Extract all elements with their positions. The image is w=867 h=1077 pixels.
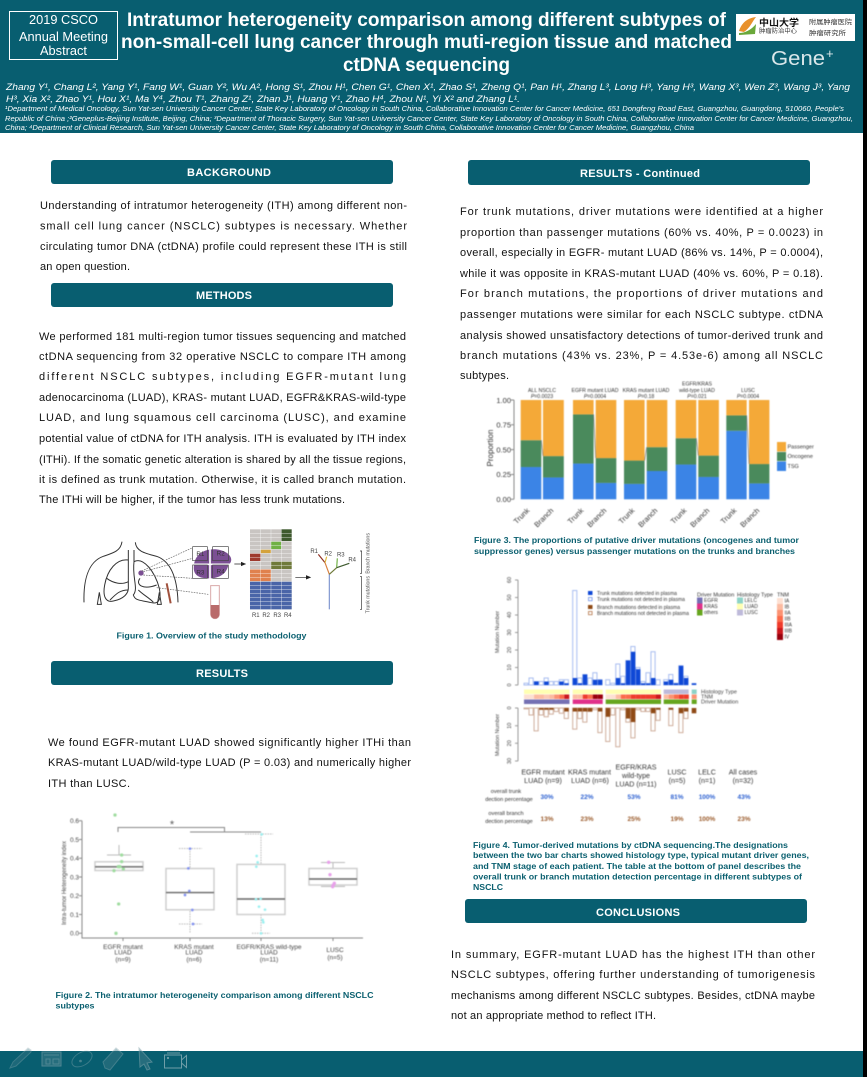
text: results continued: subtypes. [460, 370, 509, 382]
arrow: tumour to heatmap [234, 562, 245, 566]
icon: blood tube [211, 586, 219, 619]
phylogenetic tree: R3 [337, 552, 345, 558]
text: methods: LUAD, and lung squamous cell carcinoma (LUSC), and examine [39, 412, 406, 424]
panel titles: P=0.0004 [737, 394, 759, 400]
x labels: Trunk [669, 506, 689, 526]
connectors between bars [541, 414, 749, 464]
heatmap of mutations: R2 [262, 613, 271, 619]
detection table: dection percentage [485, 797, 533, 803]
heatmap of mutations: R3 [273, 613, 282, 619]
detection table: 23% [580, 816, 594, 823]
top axis: 40 [507, 612, 513, 618]
affiliations: ¹Department of Medical Oncology, Sun Yat-sen University Cancer Center, State Key Laboratory of Oncology in South China, Collaborative Innovation Center for Cancer Medicine, 651 Dongfeng Road East, Guangzhou, Guangdong, 510060, People's [5, 104, 844, 113]
detection table: overall trunk [491, 789, 521, 795]
header band [0, 0, 863, 133]
annotation tracks: Driver Mutation [701, 700, 738, 706]
legend: TNM: IA [784, 598, 790, 604]
category labels: EGFR/KRAS wild-type [236, 944, 302, 951]
panel titles: KRAS mutant LUAD [623, 388, 670, 394]
legend: mutation types: Branch mutations detected in plasma [597, 605, 680, 611]
legend: mutation types: Branch mutations not detected in plasma [597, 611, 689, 617]
icon: tumour blob with four regions: R1 [196, 551, 205, 558]
axes: 0.4 [70, 856, 79, 862]
category labels [103, 944, 344, 964]
top axis: 10 [507, 664, 513, 671]
category labels: (n=5) [327, 954, 343, 962]
detection table: 22% [580, 794, 594, 801]
heading: background: BACKGROUND [187, 167, 271, 179]
detection table: 25% [627, 816, 641, 823]
top axis: 20 [507, 647, 513, 653]
logo: Sun Yat-sen University: 肿瘤防治中心 [759, 27, 797, 35]
logo: Sun Yat-sen University: 肿瘤研究所 [809, 28, 847, 37]
text: conclusions: not an appropriate method to reflect ITH. [451, 1010, 656, 1022]
icon: cursor arrow [139, 1048, 152, 1070]
legend: driver mutation: others [704, 610, 718, 616]
caption: figure 2 [56, 990, 374, 1010]
category labels: (n=6) [186, 956, 202, 964]
heading: results: RESULTS [196, 668, 248, 680]
conference box: Annual Meeting [19, 30, 108, 44]
legend: TNM: TNM [777, 592, 789, 598]
legend: histology type: Histology Type [737, 592, 773, 598]
detection table: 19% [670, 816, 684, 823]
axes: 0.6 [70, 818, 79, 825]
x labels: Branch [636, 506, 659, 529]
bottom axis [495, 706, 518, 764]
text: methods: The ITHi will be higher, if the tumor has less trunk mutations. [39, 494, 345, 506]
text: results continued: For trunk mutations, driver mutations were identified at a higher [460, 206, 823, 218]
text: results continued: proportion than passenger mutations (60% vs. 40%, P = 0.0023) in [460, 227, 823, 239]
icon: tumour blob with four regions: R3 [196, 569, 205, 576]
icon: eraser [103, 1048, 123, 1070]
caption: figure 4: Figure 4. Tumor-derived mutations by ctDNA sequencing.The designations [473, 840, 788, 850]
detection table: LUAD (n=11) [615, 780, 657, 788]
category labels: LUSC [326, 947, 344, 954]
category labels: (n=9) [115, 956, 131, 964]
legend: driver mutation: EGFR [704, 598, 718, 604]
text: results continued: overall, especially in EGFR- mutant LUAD (86% vs. 14%, P = 0.0004), [460, 247, 823, 259]
heatmap of mutations: R1 [252, 613, 260, 619]
detection table: 100% [699, 816, 716, 823]
top axis: 30 [507, 629, 513, 636]
y axis [486, 396, 514, 504]
detection table: LELC [698, 768, 716, 776]
annotation tracks: Histology Type [701, 690, 737, 696]
caption: figure 4: overall trunk or branch mutation detection percentage in different subtypes of [473, 872, 802, 882]
category labels: (n=11) [260, 956, 278, 964]
text: background: small cell lung cancer (NSCLC) subtypes is necessary. Whether [40, 220, 407, 232]
text: background: circulating tumor DNA (ctDNA) profile could represent these ITH is still [40, 241, 407, 253]
top axis: 60 [507, 577, 513, 583]
text: results continued: For branch mutations, the proportions of driver mutations and [460, 288, 823, 300]
significance bracket: * [170, 819, 175, 831]
text: methods: adenocarcinoma (LUAD), KRAS- mutant LUAD, EGFR&KRAS-wild-type [39, 392, 406, 404]
caption: figure 3: suppressor genes) versus passenger mutations on the trunks and branches [474, 546, 795, 556]
category labels: LUAD [185, 950, 203, 956]
category labels: EGFR mutant [103, 944, 143, 951]
detection table: 13% [540, 816, 554, 823]
legend: histology type: LELC [744, 598, 757, 604]
bottom axis: 10 [507, 723, 513, 729]
heading: background [51, 160, 393, 184]
heatmap of mutations [250, 529, 292, 619]
panel titles: P=0.18 [638, 394, 654, 400]
heading: results [51, 661, 393, 685]
icon: window [42, 1052, 61, 1066]
heading: methods [51, 283, 393, 307]
heading: conclusions [465, 899, 807, 923]
y axis: Proportion [486, 430, 495, 466]
text: methods: We performed 181 multi-region tumor tissues sequencing and matched [39, 331, 406, 343]
detection table: (n=32) [733, 777, 753, 785]
legend: TNM: IB [784, 604, 790, 610]
panel titles: EGFR mutant LUAD [572, 388, 619, 394]
branch bars [524, 708, 696, 747]
caption: figure 4: NSCLC [473, 882, 503, 892]
text: conclusions [451, 949, 816, 1022]
heatmap of mutations: R4 [284, 613, 292, 619]
x labels: Branch [738, 506, 761, 529]
title: Intratumor heterogeneity comparison among different subtypes of [127, 10, 727, 31]
icon: primary tumour dot with dashed links [138, 548, 208, 603]
icon: video camera [164, 1050, 186, 1068]
text: results continued [459, 206, 824, 382]
legend: Oncogene [788, 454, 813, 460]
text: results: KRAS-mutant LUAD/wild-type LUAD (P = 0.03) and numerically higher [48, 757, 411, 769]
conference box [10, 12, 118, 60]
caption: figure 3: Figure 3. The proportions of putative driver mutations (oncogenes and tumor [474, 535, 800, 545]
detection table: overall branch [488, 811, 524, 817]
text: background [40, 200, 407, 273]
footer band [0, 1051, 863, 1077]
text: conclusions: NSCLC subtypes, offering further understanding of tumorigenesis [451, 969, 816, 981]
category labels: LUAD [260, 950, 278, 956]
legend: TNM: IIB [784, 616, 791, 622]
text: results continued: analysis showed unsatisfactory detections of tumor-derived trunk and [460, 330, 823, 342]
logo: Sun Yat-sen University: 附属肿瘤医院 [809, 17, 853, 26]
affiliations: Republic of China ;²Geneplus-Beijing Institute, Beijing, China; ³Department of Thoracic Surgery, Sun Yat-sen University Cancer Center, State Key Laboratory of Oncology in South China, Collaborative Innovation Center for Cancer Medicine, Guangzhou, [5, 114, 853, 123]
legend: TNM: IIA [784, 610, 791, 616]
icon: tumour blob with four regions [193, 547, 231, 579]
detection table: 30% [540, 794, 554, 801]
affiliations [5, 104, 853, 132]
text: background: an open question. [40, 261, 130, 273]
axes: 0.1 [70, 912, 79, 919]
legend: TNM: IV [784, 634, 790, 640]
icon: tumour blob with four regions: R2 [217, 550, 225, 557]
panel titles: P=0.0004 [584, 394, 606, 400]
x labels: Branch [532, 506, 555, 529]
conference box: 2019 CSCO [29, 13, 98, 27]
legend: mutation types: Trunk mutations not detected in plasma [597, 597, 685, 603]
y axis: 0.50 [496, 445, 511, 454]
text: methods: it is defined as trunk mutation. Otherwise, it is called branch mutation. [39, 474, 406, 486]
figure 3: stacked proportion bars [486, 382, 814, 529]
caption: figure 2: Figure 2. The intratumor heterogeneity comparison among different NSCLC [56, 990, 374, 1000]
logo: Sun Yat-sen University: 中山大学 [759, 17, 800, 29]
top axis: 50 [507, 594, 513, 601]
authors: Zhang Y¹, Chang L², Yang Y¹, Fang W¹, Guan Y², Wu A², Hong S¹, Zhou H¹, Chen G¹, Chen X¹, Zhao S¹, Zheng Q¹, Pan H¹, Zhang L³, Long H³, Yang H³, Wang X³, Wen Z³, Wang J³, Yang [5, 82, 851, 93]
phylogenetic tree: R4 [348, 557, 357, 563]
legend: mutation types: Trunk mutations detected in plasma [597, 591, 677, 597]
top axis [495, 577, 518, 687]
box: KRAS mutant [166, 848, 214, 933]
y axis: 0.00 [496, 495, 511, 504]
x labels: Trunk [719, 506, 739, 526]
legend: histology type: LUSC [744, 610, 758, 616]
text: methods: different NSCLC subtypes, including EGFR-mutant lung [39, 371, 406, 383]
x labels: Trunk [566, 506, 586, 526]
detection table: wild-type [621, 772, 650, 780]
detection table: KRAS mutant [568, 768, 611, 776]
detection table: EGFR mutant [521, 768, 565, 776]
text: results continued: branch mutations (43% vs. 23%, P = 4.53e-6) among all NSCLC [460, 350, 823, 362]
caption: figure 4: and TNM stage of each patient. The table at the bottom of panel describes the [473, 861, 801, 871]
figure 2: box plot of ITH index [61, 813, 363, 964]
y axis: 0.25 [496, 470, 511, 479]
x labels [512, 506, 761, 529]
detection table: 53% [627, 794, 641, 801]
bottom axis: 0 [507, 706, 513, 710]
text: results continued: passenger mutations were similar for each NSCLC subtype. ctDNA [460, 309, 824, 321]
top axis: Mutation Number [495, 611, 501, 653]
panel titles: wild-type LUAD [679, 388, 715, 394]
panel titles [528, 382, 759, 400]
annotation tracks: TNM [701, 694, 713, 700]
detection table [485, 764, 758, 825]
icon: pencil [10, 1048, 31, 1068]
y axis: 0.75 [496, 420, 511, 430]
text: conclusions: In summary, EGFR-mutant LUAD has the highest ITH than other [451, 949, 815, 961]
text: methods [39, 331, 406, 506]
icon: torso and lungs [84, 542, 178, 604]
caption: figure 4 [473, 840, 809, 892]
legend: histology type [737, 592, 773, 616]
legend: Passenger [788, 444, 814, 450]
detection table: All cases [729, 768, 758, 776]
bottom axis: Mutation Number [495, 714, 501, 756]
detection table: LUAD (n=6) [571, 777, 609, 785]
category labels: LUAD [114, 950, 132, 956]
legend: driver mutation: Driver Mutation [697, 592, 734, 598]
detection table: LUAD (n=9) [524, 777, 562, 785]
text: conclusions: mechanisms among different NSCLC subtypes. Besides, ctDNA maybe [451, 990, 815, 1002]
conference box: Abstract [40, 44, 88, 58]
box: LUSC [309, 862, 357, 886]
authors [5, 82, 851, 105]
category labels: KRAS mutant [174, 944, 214, 951]
detection table: dection percentage [485, 819, 533, 825]
icon: tumour blob with four regions: R4 [217, 569, 225, 576]
affiliations: China; ⁴Department of Clinical Research, Sun Yat-sen University Cancer Center, State Key Laboratory of Oncology in South China, Collaborative Innovation Center for Cancer Medicine, Guangzhou, China [5, 123, 694, 132]
caption: figure 1: Figure 1. Overview of the study methodology [116, 630, 307, 640]
legend [777, 442, 814, 471]
bottom axis: 30 [507, 758, 513, 764]
axes: Intra-tumor Heterogeneity index [61, 840, 68, 925]
x labels: Branch [585, 506, 608, 529]
legend: TNM: IIIB [784, 628, 793, 634]
data points [112, 813, 336, 935]
text: methods: ctDNA sequencing from 32 operative NSCLC to compare ITH among [39, 351, 406, 363]
text: methods: (ITHi). If the somatic genetic alteration is shared by all the tissue regions, [39, 454, 406, 466]
footer toolbar icons [10, 1048, 186, 1070]
trunk bars [524, 590, 696, 685]
top axis: 0 [507, 683, 513, 687]
axes: 0.5 [70, 837, 79, 844]
authors: H³, Xia X², Zhao Y¹, Hou X¹, Ma Y⁴, Zhou T¹, Zhang Z¹, Zhan J¹, Huang Y¹, Zhao H⁴, Zhou N¹, Yi X² and Zhang L¹. [6, 94, 520, 105]
legend: histology type: LUAD [744, 604, 758, 610]
title: non-small-cell lung cancer through muti-region tissue and matched [121, 32, 732, 53]
detection table: (n=1) [699, 777, 715, 785]
legend: TSG [788, 464, 799, 470]
heading: results continued [468, 160, 810, 185]
detection table: 81% [670, 794, 684, 801]
logo: Sun Yat-sen University [736, 14, 855, 41]
caption: figure 4: between the two bar charts showed histology type, typical mutant driver genes, [473, 850, 809, 860]
legend: driver mutation: KRAS [704, 604, 718, 610]
detection table: 43% [737, 794, 751, 801]
text: methods: potential value of ctDNA for ITH analysis. ITH is evaluated by ITH index [39, 433, 406, 445]
x labels: Branch [688, 506, 711, 529]
caption: figure 2: subtypes [56, 1000, 95, 1010]
legend: driver mutation [697, 592, 734, 616]
phylogenetic tree [310, 549, 357, 609]
icon: mouse [69, 1048, 95, 1070]
annotation tracks [524, 690, 738, 706]
x labels: Trunk [512, 506, 532, 526]
axes: 0.3 [70, 874, 79, 881]
text: results continued: while it was opposite in KRAS-mutant LUAD (40% vs. 60%, P = 0.18). [459, 268, 823, 280]
title: ctDNA sequencing [343, 55, 510, 76]
box: EGFR mutant [95, 845, 143, 870]
y axis: 1.00 [496, 396, 511, 405]
phylogenetic tree: R2 [324, 551, 333, 557]
phylogenetic tree: R1 [310, 549, 319, 555]
text: results: We found EGFR-mutant LUAD showed significantly higher ITHi than [48, 737, 411, 749]
panel titles: LUSC [741, 388, 755, 394]
figure 4: mutation detection bar charts [485, 577, 793, 825]
arrow: heatmap to tree [295, 576, 310, 579]
detection table: 100% [699, 794, 716, 801]
detection table: 23% [737, 816, 751, 823]
panel titles: ALL NSCLC [528, 388, 556, 394]
legend: mutation types [588, 591, 689, 617]
legend: TNM: IIIA [784, 622, 793, 628]
logo: Gene+: Gene [771, 48, 825, 70]
heading: methods: METHODS [196, 290, 252, 302]
legend: TNM [777, 592, 793, 640]
figure 1: study methodology [84, 529, 371, 619]
brackets and labels: Trunk mutations [365, 576, 371, 613]
logo: Gene+: + [826, 46, 834, 61]
panel titles: P=0.0023 [531, 394, 553, 400]
title [121, 10, 732, 76]
bottom axis: 20 [507, 740, 513, 746]
stacked bars [521, 400, 769, 499]
box: EGFR/KRAS wild-type [237, 834, 285, 933]
caption: figure 3 [474, 535, 800, 556]
heading: conclusions: CONCLUSIONS [596, 907, 680, 919]
axes: 0.0 [70, 931, 79, 938]
detection table: EGFR/KRAS [616, 764, 657, 772]
detection table: LUSC [668, 768, 686, 776]
panel titles: P=0.021 [687, 394, 707, 400]
text: background: Understanding of intratumor heterogeneity (ITH) among different non- [40, 200, 407, 212]
text: results: ITH than LUSC. [48, 778, 130, 790]
brackets and labels: Branch mutations [365, 533, 371, 574]
detection table: (n=5) [669, 777, 685, 785]
axes [61, 818, 363, 941]
x labels: Trunk [617, 506, 637, 526]
heading: results continued: RESULTS - Continued [580, 168, 700, 180]
axes: 0.2 [70, 893, 79, 900]
text: results [48, 737, 411, 790]
significance bracket [118, 819, 261, 832]
brackets and labels [360, 533, 371, 613]
panel titles: EGFR/KRAS [682, 382, 713, 388]
